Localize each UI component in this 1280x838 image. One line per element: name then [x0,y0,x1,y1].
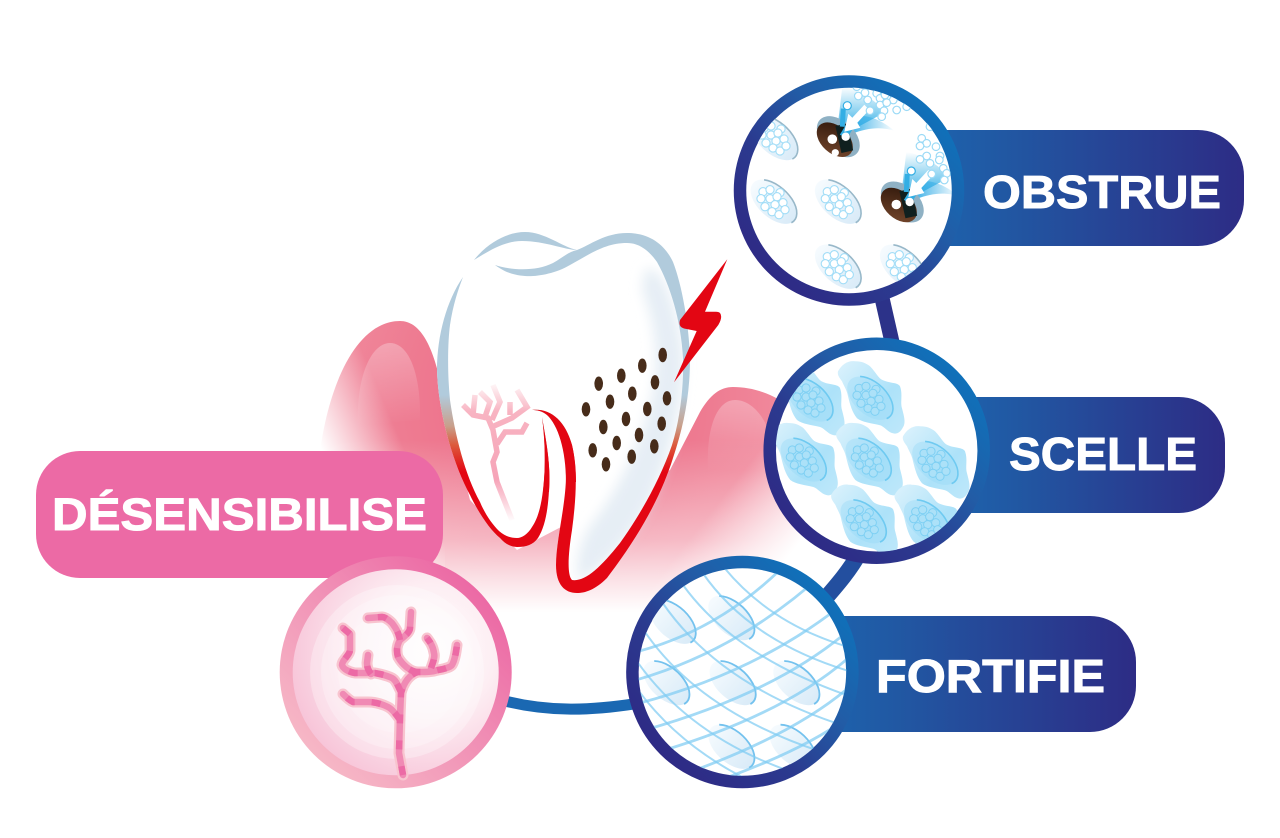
label: SCELLE: SCELLE [1009,428,1197,480]
connector: top to middle circle [882,298,892,342]
icon: lightning bolt [674,259,727,382]
circle: obstrue [740,82,958,300]
label: DÉSENSIBILISE [36,451,443,578]
crown and right root outline [495,233,690,593]
open tubule one [816,88,911,158]
left root outline [437,277,549,547]
tooth [437,232,727,593]
nerve tree [342,612,457,775]
connector: middle to lower circle [824,552,860,600]
connector: pink circle to lower circle [505,701,640,709]
label: DÉSENSIBILISE: DÉSENSIBILISE [52,489,427,540]
label: FORTIFIE: FORTIFIE [876,650,1105,702]
closed tubules [751,118,922,289]
tooth body [437,232,690,593]
open tubule two [880,124,952,222]
circle: scelle [770,344,984,558]
circle: pink nerve [280,556,512,788]
circle: fortifie [632,562,855,782]
label: OBSTRUE [900,130,1244,246]
tooth shading [577,269,683,582]
label: FORTIFIE [795,616,1136,732]
label: OBSTRUE: OBSTRUE [983,166,1221,218]
mesh cells [644,595,820,769]
crown lobe outline [474,232,577,260]
label: SCELLE [925,397,1225,513]
nerve in tooth [463,385,527,520]
gums [300,300,860,650]
left root inner red edge [542,417,549,492]
protective mesh [636,565,855,782]
sealed tubules [771,361,970,557]
right root inner red edge [532,410,576,482]
dentin tubule dots [582,348,671,471]
